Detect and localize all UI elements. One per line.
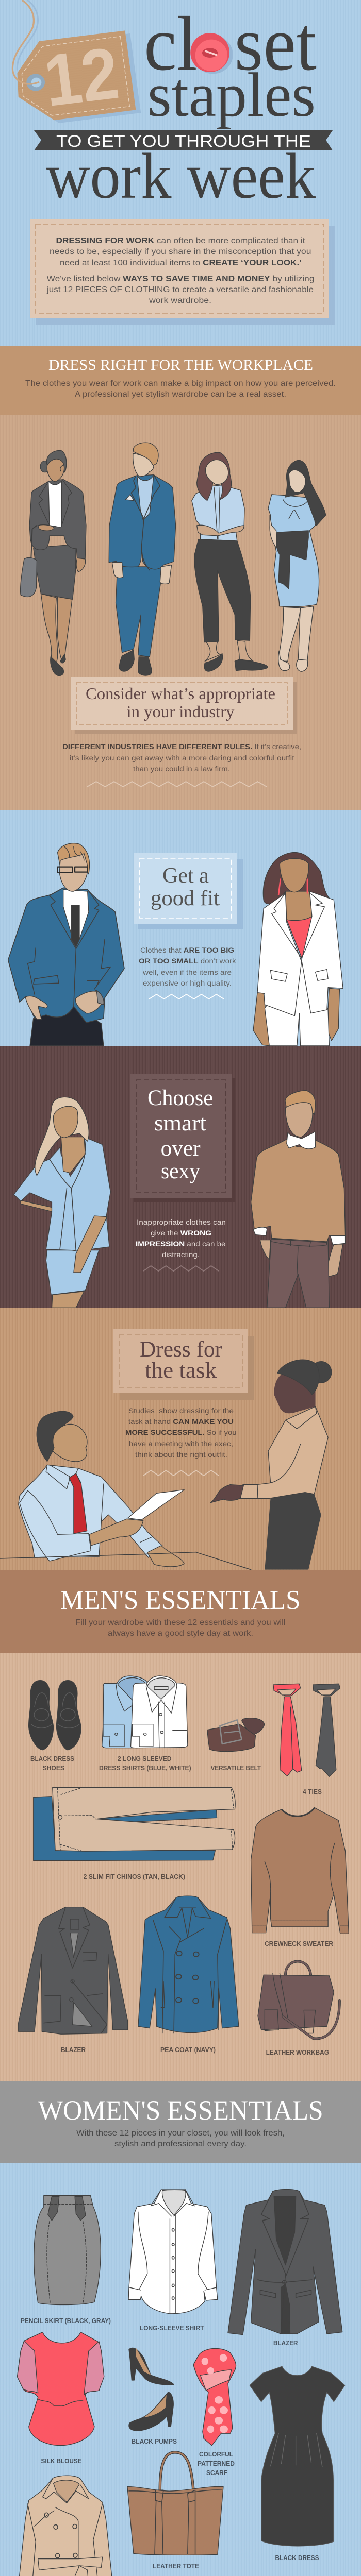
item: long-sleeve shirt: LONG-SLEEVE SHIRT	[140, 2325, 204, 2332]
card: choose smart over sexy heading: Choose	[147, 1086, 213, 1110]
item: black dress shoes: BLACK DRESS	[30, 1755, 74, 1762]
band: dress right for the workplace: DRESS RIGHT FOR THE WORKPLACE	[48, 357, 313, 374]
intro text card: DRESSING FOR WORK can often be more complicated than it	[56, 236, 305, 245]
item: women's blazer	[228, 2190, 342, 2347]
intro text card: work wardrobe.	[149, 296, 211, 305]
panel: consider what's appropriate	[0, 415, 361, 810]
icon: price tag with number 12: 12	[40, 32, 123, 122]
item: slim fit chinos: 2 SLIM FIT CHINOS (TAN, BLACK)	[84, 1873, 185, 1880]
item: colorful patterned scarf: PATTERNED	[198, 2460, 235, 2467]
band: men's essentials: Fill your wardrobe with these 12 essentials and you will	[75, 1618, 286, 1627]
card: consider what's appropriate heading	[71, 677, 297, 734]
text: inappropriate clothes	[136, 1218, 226, 1259]
band: men's essentials: always have a good style day at work.	[108, 1629, 253, 1638]
item: two dress shirts: DRESS SHIRTS (BLUE, WHITE)	[99, 1765, 191, 1772]
band: men's essentials	[0, 1570, 361, 1653]
text: clothes that are too big: well, even if the items are	[142, 969, 232, 976]
item: black dress shoes: SHOES	[43, 1765, 64, 1772]
item: crewneck sweater	[251, 1807, 349, 1947]
figure: woman in gray suit	[21, 450, 86, 676]
text: inappropriate clothes: Inappropriate clothes can	[137, 1218, 226, 1226]
title: closet: closet	[144, 1, 317, 87]
item: pea coat: PEA COAT (NAVY)	[160, 2046, 216, 2054]
card: get a good fit heading: good fit	[151, 887, 220, 910]
icon: price tag with number 12	[12, 0, 141, 123]
card: get a good fit heading: Get a	[162, 864, 209, 888]
panel: women's items	[0, 2163, 361, 2576]
title: staples: staples	[147, 60, 316, 130]
item: leather tote	[127, 2452, 223, 2570]
card: choose smart over sexy heading: over	[161, 1137, 201, 1161]
text: clothes that are too big: Clothes that ARE TOO BIG	[140, 946, 234, 954]
band: women's essentials	[0, 2081, 361, 2163]
item: pencil skirt: PENCIL SKIRT (BLACK, GRAY)	[21, 2317, 111, 2325]
text: different industries: it’s likely you can get away with a more daring and colorful outfit	[70, 754, 294, 762]
panel: choose smart over sexy	[0, 1046, 361, 1308]
item: leather workbag	[258, 1961, 339, 2056]
figure: standing woman in blouse	[210, 1360, 332, 1570]
band: women's essentials: stylish and professional every day.	[114, 2140, 247, 2148]
panel: get a good fit	[0, 810, 361, 1046]
item: pencil skirt	[21, 2196, 111, 2325]
text: different industries: DIFFERENT INDUSTRIES HAVE DIFFERENT RULES. If it’s creative,	[62, 743, 301, 751]
card: get a good fit heading	[134, 853, 243, 929]
band: dress right for the workplace: A professional yet stylish wardrobe can be a real asset.	[75, 390, 286, 399]
item: blazer	[19, 1907, 128, 2054]
item: black pumps: BLACK PUMPS	[131, 2438, 177, 2445]
panel: men's items	[0, 1653, 361, 2081]
item: blazer: BLAZER	[61, 2046, 86, 2054]
banner: to get you through the	[34, 130, 333, 150]
band: women's essentials: With these 12 pieces in your closet, you will look fresh,	[76, 2129, 285, 2138]
band: dress right for the workplace: The clothes you wear for work can make a big impact on how you are perceived.	[25, 379, 336, 388]
item: four ties	[273, 1684, 340, 1795]
item: slim fit chinos	[34, 1787, 235, 1880]
figure: man in blue suit	[109, 443, 176, 675]
item: four ties: 4 TIES	[303, 1788, 322, 1795]
item: colorful patterned scarf: COLORFUL	[199, 2451, 233, 2458]
intro text card: need at least 100 individual items to CREATE ‘YOUR LOOK.’	[60, 259, 302, 267]
intro text card: needs to be, especially if you share in the misconception that you	[50, 247, 311, 256]
item: women's blazer: BLAZER	[273, 2340, 298, 2347]
panel: dress for the task	[0, 1308, 361, 1570]
figure: woman in blue dress	[268, 460, 326, 671]
text: inappropriate clothes: distracting.	[162, 1251, 200, 1259]
card: choose smart over sexy heading	[130, 1074, 235, 1202]
item: long-sleeve shirt	[128, 2190, 218, 2332]
item: silk blouse: SILK BLOUSE	[41, 2458, 81, 2465]
card: consider what's appropriate heading: Consider what’s appropriate	[86, 684, 275, 703]
figure: woman in white suit	[253, 852, 343, 1046]
title: work week: work week	[46, 141, 316, 212]
item: leather workbag: LEATHER WORKBAG	[266, 2049, 329, 2056]
card: dress for the task heading	[113, 1329, 254, 1400]
text: studies show dressing: Studies show dressing for the	[128, 1407, 234, 1415]
item: colorful patterned scarf	[193, 2348, 236, 2477]
item: crewneck sweater: CREWNECK SWEATER	[265, 1940, 333, 1947]
item: black dress	[250, 2366, 345, 2562]
intro text card	[30, 219, 335, 325]
text: different industries	[62, 743, 301, 773]
figure: woman in light blue skirt suit	[14, 1097, 110, 1308]
card: consider what's appropriate heading: in your industry	[127, 702, 234, 721]
figure: seated man with paper	[0, 1411, 251, 1570]
item: versatile belt: VERSATILE BELT	[210, 1765, 261, 1772]
icon: red button	[190, 33, 233, 74]
text: studies show dressing: have a meeting with the exec,	[129, 1440, 233, 1448]
text: studies show dressing: think about the right outfit.	[135, 1451, 227, 1459]
item: two dress shirts	[99, 1676, 191, 1772]
item: silk blouse	[17, 2332, 104, 2465]
text: clothes that are too big	[139, 946, 236, 987]
figure: man in blue blazer with glasses	[8, 843, 124, 1046]
item: trench coat	[16, 2476, 115, 2576]
item: black dress: BLACK DRESS	[275, 2554, 319, 2562]
figure: man in tan sweater	[251, 1091, 346, 1308]
text: studies show dressing	[125, 1407, 236, 1459]
text: clothes that are too big: expensive or high quality.	[143, 979, 232, 987]
item: pea coat	[138, 1896, 239, 2054]
item: two dress shirts: 2 LONG SLEEVED	[118, 1755, 171, 1762]
banner: to get you through the: TO GET YOU THROUGH THE	[56, 132, 311, 150]
text: inappropriate clothes: IMPRESSION and can be	[136, 1240, 226, 1248]
card: dress for the task heading: the task	[145, 1359, 217, 1383]
card: dress for the task heading: Dress for	[140, 1337, 222, 1362]
card: choose smart over sexy heading: sexy	[161, 1159, 200, 1183]
text: clothes that are too big: OR TOO SMALL don’t work	[139, 957, 236, 965]
intro text card: We've listed below WAYS TO SAVE TIME AND MONEY by utilizing	[46, 275, 315, 283]
text: different industries: than you could in a law firm.	[133, 765, 230, 773]
text: inappropriate clothes: give the WRONG	[151, 1229, 211, 1237]
item: versatile belt	[207, 1718, 264, 1772]
band: dress right for the workplace	[0, 346, 361, 415]
item: colorful patterned scarf: SCARF	[206, 2469, 227, 2477]
text: studies show dressing: MORE SUCCESSFUL. So if you	[125, 1429, 236, 1436]
band: men's essentials: MEN'S ESSENTIALS	[60, 1585, 301, 1615]
item: leather tote: LEATHER TOTE	[153, 2563, 199, 2570]
text: studies show dressing: task at hand CAN MAKE YOU	[128, 1418, 234, 1426]
item: black dress shoes	[29, 1681, 81, 1772]
header panel	[0, 0, 361, 346]
item: black pumps	[129, 2348, 177, 2445]
card: choose smart over sexy heading: smart	[154, 1111, 206, 1136]
intro text card: just 12 PIECES OF CLOTHING to create a versatile and fashionable	[46, 285, 314, 294]
figure: woman in light blue shirt	[192, 452, 268, 671]
band: women's essentials: WOMEN'S ESSENTIALS	[38, 2095, 323, 2126]
